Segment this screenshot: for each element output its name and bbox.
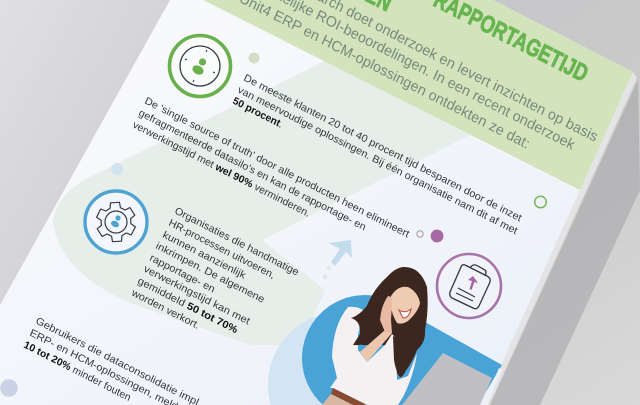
text block: HR processes: HR-processen uitvoeren, [167,218,276,281]
forearm [360,330,392,362]
text block: HR processes: kunnen aanzienlijk [161,230,248,282]
left hair strands [351,296,386,345]
hair back [362,267,428,377]
laptop [402,353,492,405]
blue backdrop [380,322,502,405]
text block: 20 to 40 percent: 50 procent. [231,96,284,131]
decorative ring: green [535,196,546,208]
pale blue circle [268,312,412,405]
photo: woman with laptop [268,267,502,405]
smile [399,309,411,318]
shirt [330,307,417,405]
icon: purple clipboard badge [437,254,501,318]
icon: green person badge [170,36,230,96]
icon: pale blue arrow [323,240,352,279]
text block: HR processes: Organisaties die handmatige [173,206,300,279]
text block: HR processes [129,206,300,336]
text block: single source of truth: De 'single source of truth' door alle producten heen elimineert [143,96,411,240]
pale green background blob [53,61,470,345]
face [391,287,420,324]
trousers [322,394,353,405]
text block: single source of truth: gefragmenteerde datasilo's en kan de rapportage- en [137,108,367,233]
text block: 20 to 40 percent: van meervoudige oplossingen. Bij één organisatie nam dit af met [236,85,519,237]
hand [380,296,392,333]
decorative dot: green [248,52,260,64]
green header panel [203,0,633,190]
text block: HR processes: inkrimpen. De algemene [154,241,266,306]
front hair strand [393,336,415,377]
page stack edge [480,72,637,405]
text block: HR processes: verwerkingstijd kan met [142,264,252,327]
text block: data consolidation: ERP- en HCM-oplossingen, meld [28,328,180,405]
decorative dots: purple [417,230,443,242]
text block: data consolidation: Gebruikers die dataconsolidatie impl [34,316,200,405]
text block: HR processes: rapportage- en [148,253,216,295]
text block: single source of truth: verwerkingstijd met wel 90% verminderen. [131,120,312,220]
belt [331,388,367,405]
text block: data consolidation: 10 tot 20% minder fouten [22,340,132,404]
icon: blue gear badge [85,191,147,253]
decorative dot: pale blue [111,163,123,175]
text block: HR processes: worden verkort. [129,287,201,332]
blue circle [302,295,428,405]
heading [361,0,592,88]
decorative dot: lavender [0,379,18,397]
text block: HR processes: gemiddeld 50 tot 70% [136,276,239,336]
text block: 20 to 40 percent: De meeste klanten 20 tot 40 procent tijd besparen door de inzet [242,73,523,224]
